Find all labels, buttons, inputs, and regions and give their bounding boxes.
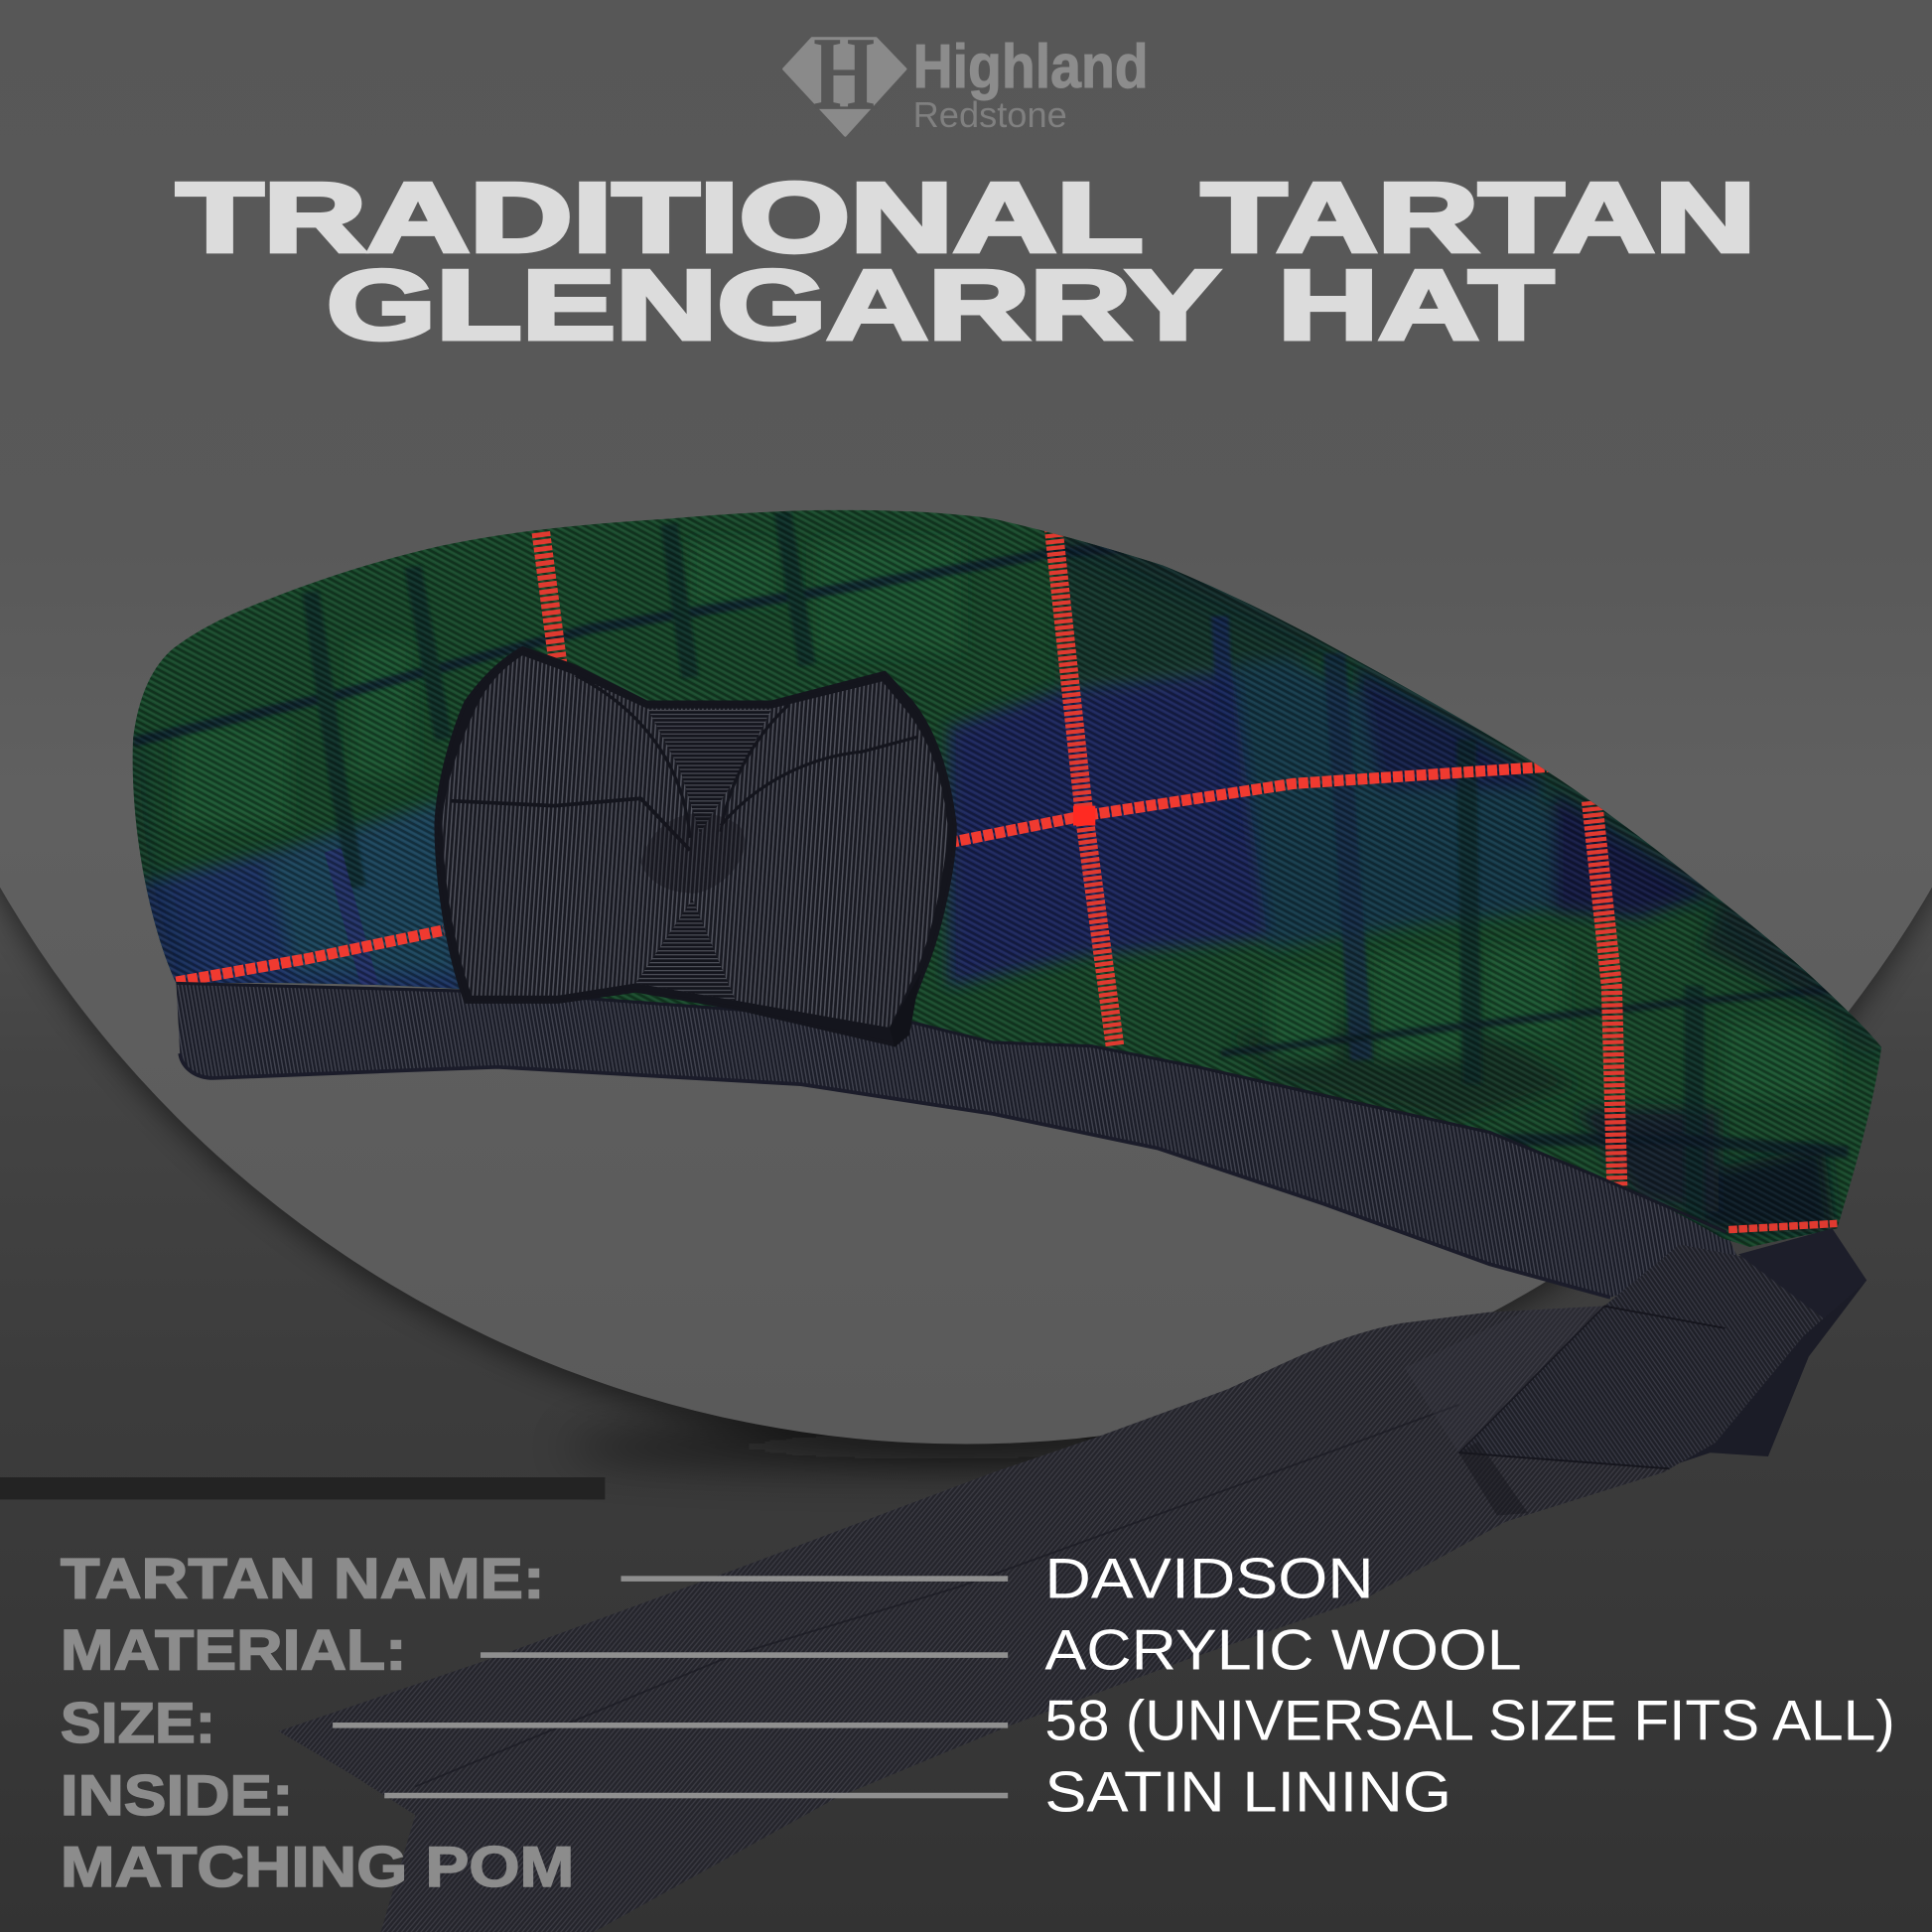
spec values: [1044, 1548, 1895, 1824]
label: tartan name: TARTAN NAME:: [61, 1548, 545, 1611]
bow: [436, 648, 955, 1047]
logo mark: [783, 15, 905, 136]
title: [176, 163, 1756, 360]
title line 2: [327, 250, 1554, 360]
bow left fold curve: [576, 675, 690, 838]
title line 2: GLENGARRY: [327, 250, 1220, 360]
rear dark tail: [1651, 1280, 1866, 1472]
label: material: MATERIAL:: [61, 1619, 407, 1683]
spec list: [61, 1548, 1895, 1899]
ribbon fold flap: [1458, 1244, 1866, 1468]
label: inside: INSIDE:: [61, 1764, 293, 1828]
bow knot: [640, 813, 745, 894]
ribbon fold pinch: [1405, 1307, 1604, 1452]
hat: [111, 492, 1910, 1298]
bow ribbon body: [443, 655, 947, 1028]
bow right lobe fold: [721, 737, 918, 826]
value: material: ACRYLIC WOOL: [1044, 1619, 1522, 1683]
title line 1: TARTAN: [1201, 163, 1756, 273]
value: inside: SATIN LINING: [1044, 1760, 1451, 1824]
ribbon flap seam: [1458, 1307, 1725, 1468]
dark plaid lines: [133, 511, 1849, 1220]
bright green squares: [179, 542, 1836, 1097]
bow bottom strap: [635, 899, 736, 1001]
ribbon centre seam: [415, 1405, 1458, 1787]
shadow beneath circle: [567, 1430, 1307, 1463]
ribbon pinch shadow: [1458, 1442, 1528, 1516]
band lower edge: [180, 1053, 1610, 1298]
label: size: SIZE:: [61, 1692, 215, 1755]
knot tip: [1738, 1228, 1866, 1318]
spec labels: [61, 1548, 574, 1899]
logo mark: H: [813, 15, 875, 130]
bow lower-right tab: [890, 973, 920, 1047]
title line 2: HAT: [1278, 250, 1554, 360]
tartan crown: [111, 492, 1910, 1257]
background circle: [0, 0, 1932, 1445]
red crossing: [1073, 806, 1095, 826]
leader lines: [333, 1576, 1008, 1798]
logo sub-wordmark: Redstone: [913, 94, 1067, 135]
title line 1: [176, 163, 1756, 273]
twill texture: [111, 492, 1910, 1257]
circle edge shadow: [0, 0, 1932, 1453]
blue plaid vertical: [333, 850, 369, 986]
value: size: 58 (UNIVERSAL SIZE FITS ALL): [1044, 1689, 1895, 1752]
title line 1: TRADITIONAL: [176, 163, 1144, 273]
section bar: [0, 1477, 605, 1499]
bow top strap: [648, 710, 771, 833]
label: matching pom: MATCHING POM: [61, 1836, 574, 1899]
bow left lobe fold: [451, 798, 690, 850]
bow shadow outline: [436, 648, 955, 1044]
bow right fold curve: [721, 705, 788, 832]
top edge darkening: [1059, 523, 1881, 1047]
logo: [783, 15, 1149, 136]
logo wordmark: Highland: [913, 33, 1149, 101]
left edge darkening: [133, 740, 176, 983]
band seam: [176, 983, 1726, 1232]
main ribbon tail: [278, 1282, 1803, 1932]
ribbon tails: [278, 1228, 1866, 1932]
blue plaid patches: [123, 530, 1849, 1232]
hat band: [176, 983, 1737, 1298]
value: tartan name: DAVIDSON: [1044, 1548, 1374, 1611]
red overcheck lines: [176, 527, 1837, 1230]
